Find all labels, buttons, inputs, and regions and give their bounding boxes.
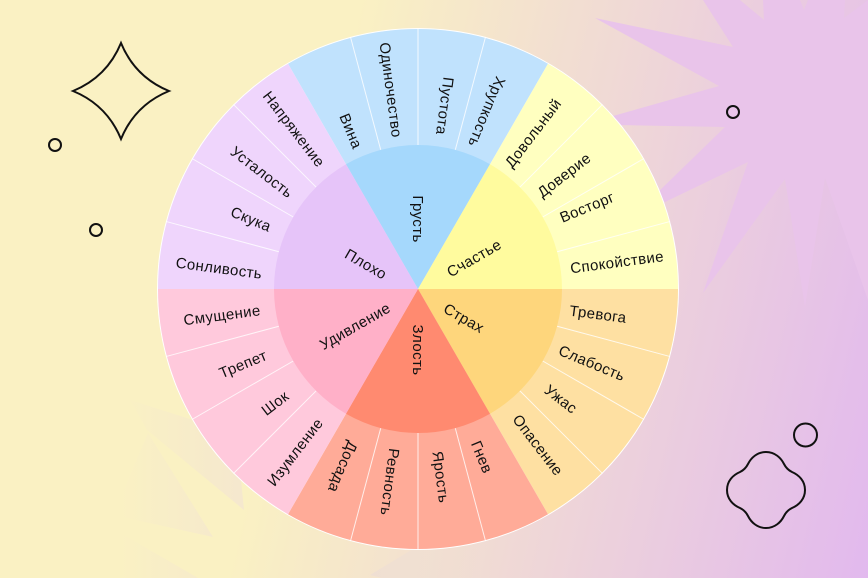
icon: four-lobed blob [727, 452, 805, 528]
icon: circle bottom right [794, 424, 817, 446]
outer labels: surprise group: Трепет [217, 347, 270, 382]
outer labels: anger group: Ревность [376, 447, 402, 517]
outer labels: bad group: Сонливость [175, 255, 263, 283]
icon: small circle left upper [49, 139, 61, 151]
outer labels: sadness group: Одиночество [376, 41, 405, 139]
core emotion labels: Удивление [317, 300, 394, 354]
starburst: top right [595, 0, 868, 307]
outer labels: sadness group: Вина [335, 111, 365, 152]
outer labels: surprise group: Изумление [264, 415, 327, 490]
core emotion labels: Злость [409, 325, 426, 375]
outer labels: sadness group: Пустота [432, 76, 456, 136]
outer labels: bad group [175, 88, 328, 283]
icon: four-point star [73, 43, 169, 139]
outer labels: fear group [509, 303, 628, 479]
outer labels: anger group: Гнев [467, 439, 496, 476]
outer labels: fear group: Тревога [568, 303, 628, 327]
outer labels: anger group: Ярость [428, 450, 452, 504]
core emotion labels: Страх [440, 300, 487, 337]
outer labels: bad group: Усталость [227, 143, 296, 202]
outer labels: anger group [324, 439, 496, 517]
outer labels: bad group: Напряжение [259, 88, 328, 171]
outer labels: surprise group: Смущение [183, 302, 262, 329]
outer labels: happiness group: Восторг [557, 189, 617, 227]
outer labels: anger group: Досада [324, 439, 360, 495]
core emotion labels: Грусть [409, 195, 426, 243]
core emotion labels: Плохо [342, 246, 390, 283]
outer labels: fear group: Слабость [556, 342, 627, 385]
outer labels: surprise group [183, 302, 327, 490]
outer labels: fear group: Опасение [509, 412, 566, 479]
starburst tip: bottom centre [370, 530, 500, 578]
inner ring segments [274, 145, 562, 433]
wheel outer white rim [157, 28, 679, 550]
outer labels: sadness group: Хрупкость [464, 74, 508, 149]
outer labels: sadness group [335, 41, 508, 152]
outer labels: fear group: Ужас [541, 382, 580, 418]
core emotion labels: Счастье [444, 236, 505, 281]
core emotion labels [317, 195, 505, 375]
emotion wheel [157, 28, 679, 550]
outer labels: happiness group: Довольный [502, 96, 565, 171]
outer ring segments [158, 29, 678, 549]
icon: small circle top right [727, 106, 739, 118]
outer labels: happiness group [502, 96, 665, 277]
outer labels: surprise group: Шок [258, 388, 292, 419]
outer labels: happiness group: Спокойствие [569, 248, 665, 277]
starburst: faint bottom left [103, 400, 244, 578]
icon: small circle left lower [90, 224, 102, 236]
outer labels: bad group: Скука [228, 204, 274, 236]
outer labels: happiness group: Доверие [534, 150, 594, 201]
